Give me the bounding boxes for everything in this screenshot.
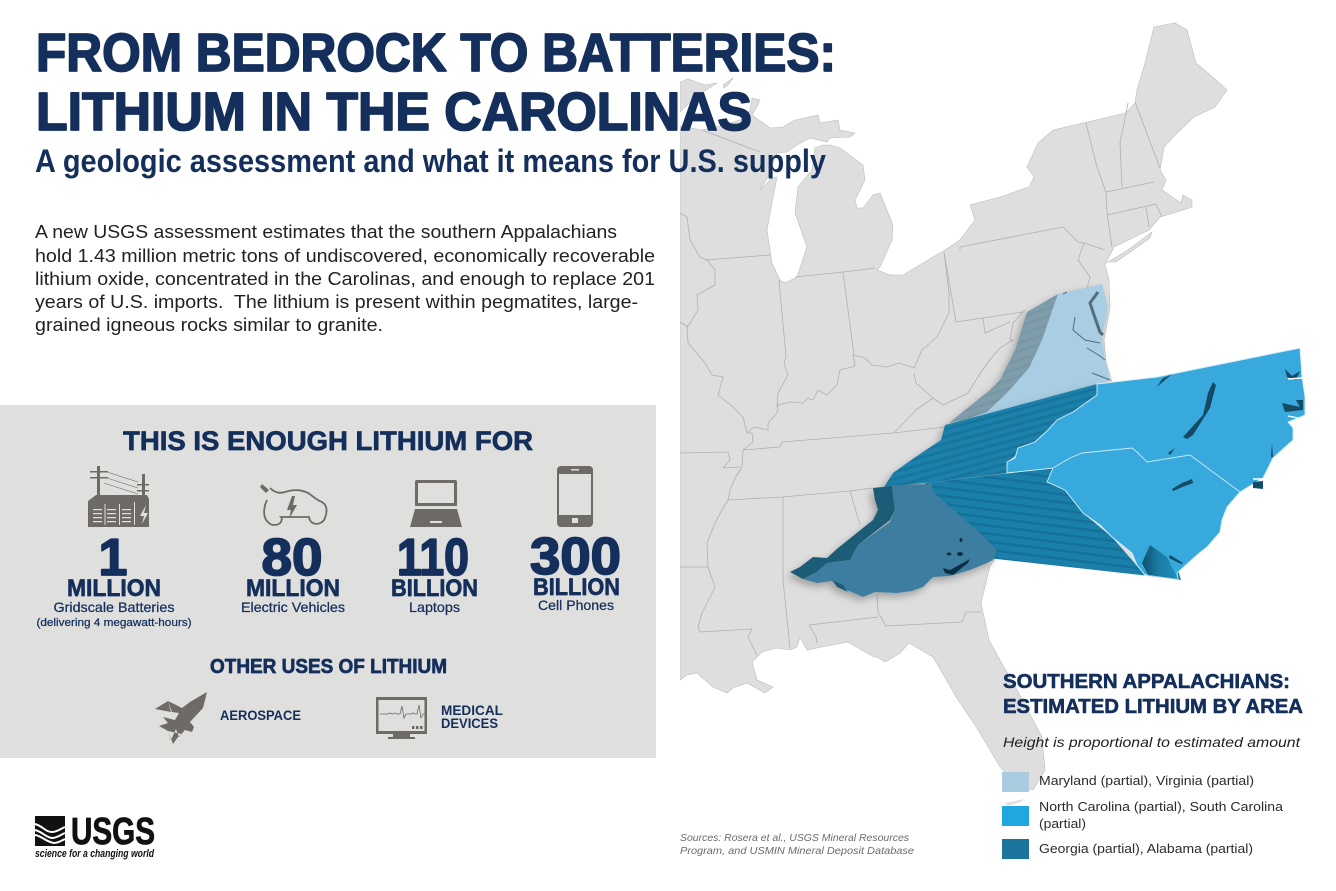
stat: 1 million gridscale batteries: Gridscale Batteries xyxy=(54,599,174,615)
icon: cell phone xyxy=(557,466,593,527)
intro paragraph xyxy=(35,221,655,335)
stat: 80 million electric vehicles xyxy=(241,529,345,615)
intro paragraph: hold 1.43 million metric tons of undiscovered, economically recoverable xyxy=(35,245,655,266)
legend note: Height is proportional to estimated amount xyxy=(1003,734,1301,750)
label: medical devices xyxy=(441,703,503,731)
stat: 110 billion laptops: 110 xyxy=(397,529,469,587)
logo: USGS: USGS xyxy=(71,811,155,853)
map: eastern United States base xyxy=(670,23,1227,806)
subtitle: A geologic assessment and what it means for U.S. supply xyxy=(35,143,826,179)
legend heading: ESTIMATED LITHIUM BY AREA xyxy=(1003,695,1303,718)
stat: 110 billion laptops xyxy=(391,529,478,615)
map: Georgia and Alabama extrusion (dark blue) xyxy=(790,484,997,597)
label: aerospace: AEROSPACE xyxy=(220,708,301,723)
label: medical devices: MEDICAL xyxy=(441,703,503,718)
stat: 300 billion cell phones xyxy=(530,528,621,613)
map: Maryland and Virginia extrusion (light blue) xyxy=(949,284,1110,423)
legend swatch: Carolinas: (partial) xyxy=(1039,816,1086,831)
panel: lithium equivalents xyxy=(0,405,656,758)
stat: 110 billion laptops: Laptops xyxy=(409,599,460,615)
title: FROM BEDROCK TO BATTERIES: xyxy=(36,23,836,83)
stat: 300 billion cell phones: Cell Phones xyxy=(538,597,614,613)
stat: 1 million gridscale batteries: (delivering 4 megawatt-hours) xyxy=(36,617,192,629)
map: North and South Carolina extrusion (bright blue) xyxy=(884,348,1308,580)
legend swatch: Georgia, Alabama xyxy=(1002,839,1253,859)
legend swatch: Carolinas xyxy=(1002,799,1284,831)
stat: 80 million electric vehicles: Electric Vehicles xyxy=(241,599,345,615)
sources note: Sources: Rosera et al., USGS Mineral Resources xyxy=(680,832,910,844)
subheading: other uses: OTHER USES OF LITHIUM xyxy=(210,656,447,678)
panel heading: THIS IS ENOUGH LITHIUM FOR xyxy=(123,426,533,456)
stat: 1 million gridscale batteries xyxy=(36,529,192,629)
icon: medical monitor xyxy=(376,697,427,739)
legend xyxy=(1002,670,1303,859)
logo: USGS: science for a changing world xyxy=(35,848,154,860)
icon: laptop xyxy=(410,480,462,527)
stat: 1 million gridscale batteries: 1 xyxy=(99,529,127,587)
legend swatch: Carolinas: North Carolina (partial), South Carolina xyxy=(1039,799,1284,814)
intro paragraph: grained igneous rocks similar to granite. xyxy=(35,314,383,335)
stat: 1 million gridscale batteries: MILLION xyxy=(67,575,161,602)
stat: 300 billion cell phones: 300 xyxy=(530,528,621,586)
legend swatch: Maryland, Virginia: Maryland (partial), Virginia (partial) xyxy=(1039,773,1254,788)
intro paragraph: A new USGS assessment estimates that the southern Appalachians xyxy=(35,221,617,242)
stat: 80 million electric vehicles: 80 xyxy=(262,529,322,587)
sources note: Program, and USMIN Mineral Deposit Database xyxy=(680,845,914,857)
logo: USGS xyxy=(35,811,155,860)
sources note xyxy=(680,832,914,857)
intro paragraph: years of U.S. imports. The lithium is present within pegmatites, large- xyxy=(35,291,638,312)
stat: 80 million electric vehicles: MILLION xyxy=(246,575,340,602)
icon: grid battery xyxy=(88,466,149,527)
title xyxy=(36,23,836,142)
stat: 300 billion cell phones: BILLION xyxy=(533,574,620,601)
title: LITHIUM IN THE CAROLINAS xyxy=(36,82,752,142)
stat: 110 billion laptops: BILLION xyxy=(391,575,478,602)
legend heading xyxy=(1003,670,1303,718)
label: medical devices: DEVICES xyxy=(441,716,498,731)
legend swatch: Maryland, Virginia xyxy=(1002,772,1254,792)
icon: electric vehicle xyxy=(260,484,327,525)
legend heading: SOUTHERN APPALACHIANS: xyxy=(1003,670,1290,693)
intro paragraph: lithium oxide, concentrated in the Carolinas, and enough to replace 201 xyxy=(35,268,655,289)
icon: fighter jet xyxy=(155,692,207,744)
legend swatch: Georgia, Alabama: Georgia (partial), Alabama (partial) xyxy=(1039,841,1253,856)
